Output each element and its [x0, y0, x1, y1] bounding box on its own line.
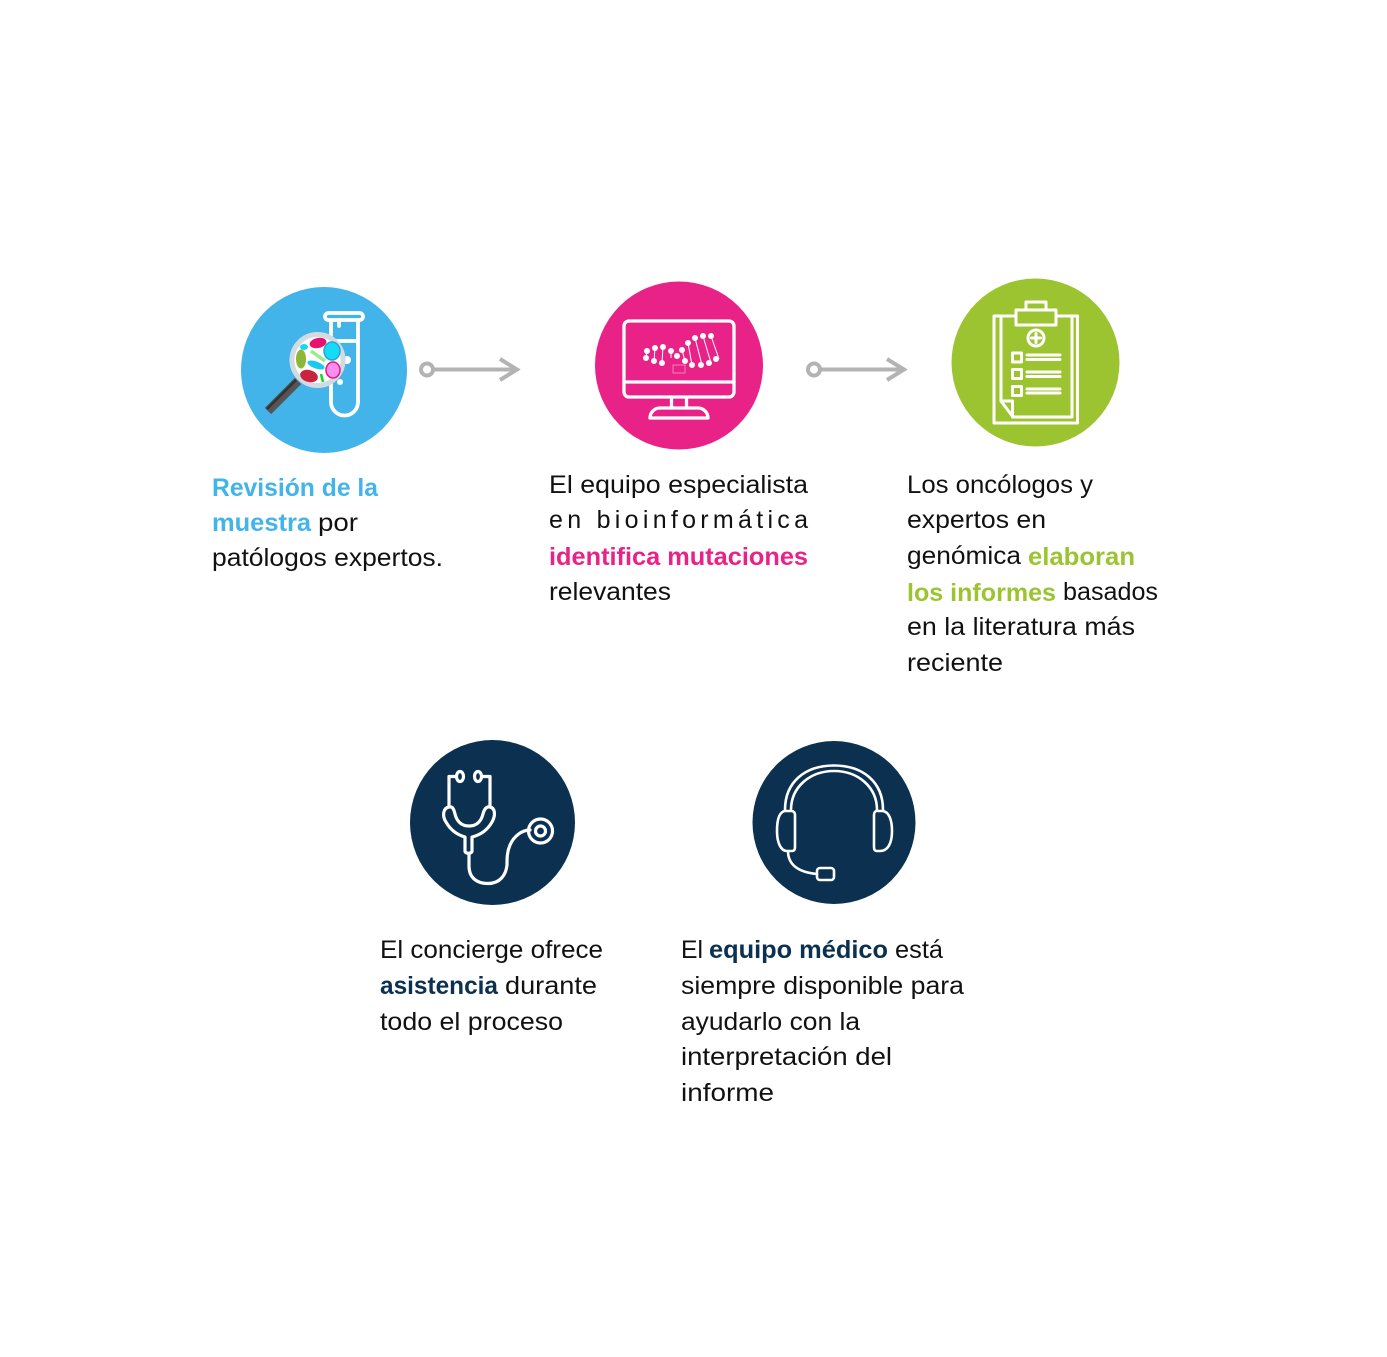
text: step 5: ayudarlo con la: [681, 1008, 860, 1036]
text: step 5: interpretación del: [681, 1043, 892, 1071]
text: step 5: está: [895, 936, 943, 964]
text: step 3: expertos en: [907, 506, 1046, 534]
icon: headset: [752, 741, 916, 904]
text: step 1: Revisión de la: [212, 474, 379, 502]
text: step 3: reciente: [907, 649, 1003, 677]
text: step 5: informe: [681, 1079, 774, 1107]
text: step 1: por: [318, 509, 358, 537]
text: step 1: [212, 474, 443, 572]
text: step 4: todo el proceso: [380, 1008, 563, 1036]
text: step 3: basados: [1063, 578, 1158, 606]
text: step 1: muestra: [212, 509, 312, 537]
text: step 1: patólogos expertos.: [212, 544, 443, 572]
text: step 2: [549, 471, 808, 606]
arrow 2: [808, 359, 904, 380]
text: step 5: equipo médico: [709, 936, 888, 964]
icon: monitor with DNA: [595, 282, 763, 450]
test tube: [325, 313, 363, 416]
text: step 3: los informes: [907, 579, 1056, 607]
text: step 5: El: [681, 936, 703, 964]
text: step 4: [380, 936, 603, 1036]
magnifier: [267, 334, 343, 411]
text: step 3: elaboran: [1028, 543, 1135, 571]
text: step 4: durante: [505, 972, 597, 1000]
icon: test tube and magnifier: [241, 287, 407, 453]
DNA: [644, 334, 719, 368]
text: step 3: en la literatura más: [907, 613, 1135, 641]
text: step 4: El concierge ofrece: [380, 936, 603, 964]
text: step 2: El equipo especialista: [549, 471, 808, 499]
text: step 5: siempre disponible para: [681, 972, 964, 1000]
icon: clipboard: [952, 278, 1120, 446]
arrow 1: [421, 359, 517, 380]
text: step 2: relevantes: [549, 578, 671, 606]
text: step 4: asistencia: [380, 972, 499, 1000]
text: step 3: [907, 471, 1158, 677]
text: step 3: genómica: [907, 542, 1021, 570]
text: step 5: [681, 936, 964, 1107]
text: step 2: identifica mutaciones: [549, 543, 808, 571]
icon: stethoscope: [410, 740, 575, 905]
text: step 3: Los oncólogos y: [907, 471, 1094, 499]
text: step 2: en bioinformática: [549, 506, 808, 534]
